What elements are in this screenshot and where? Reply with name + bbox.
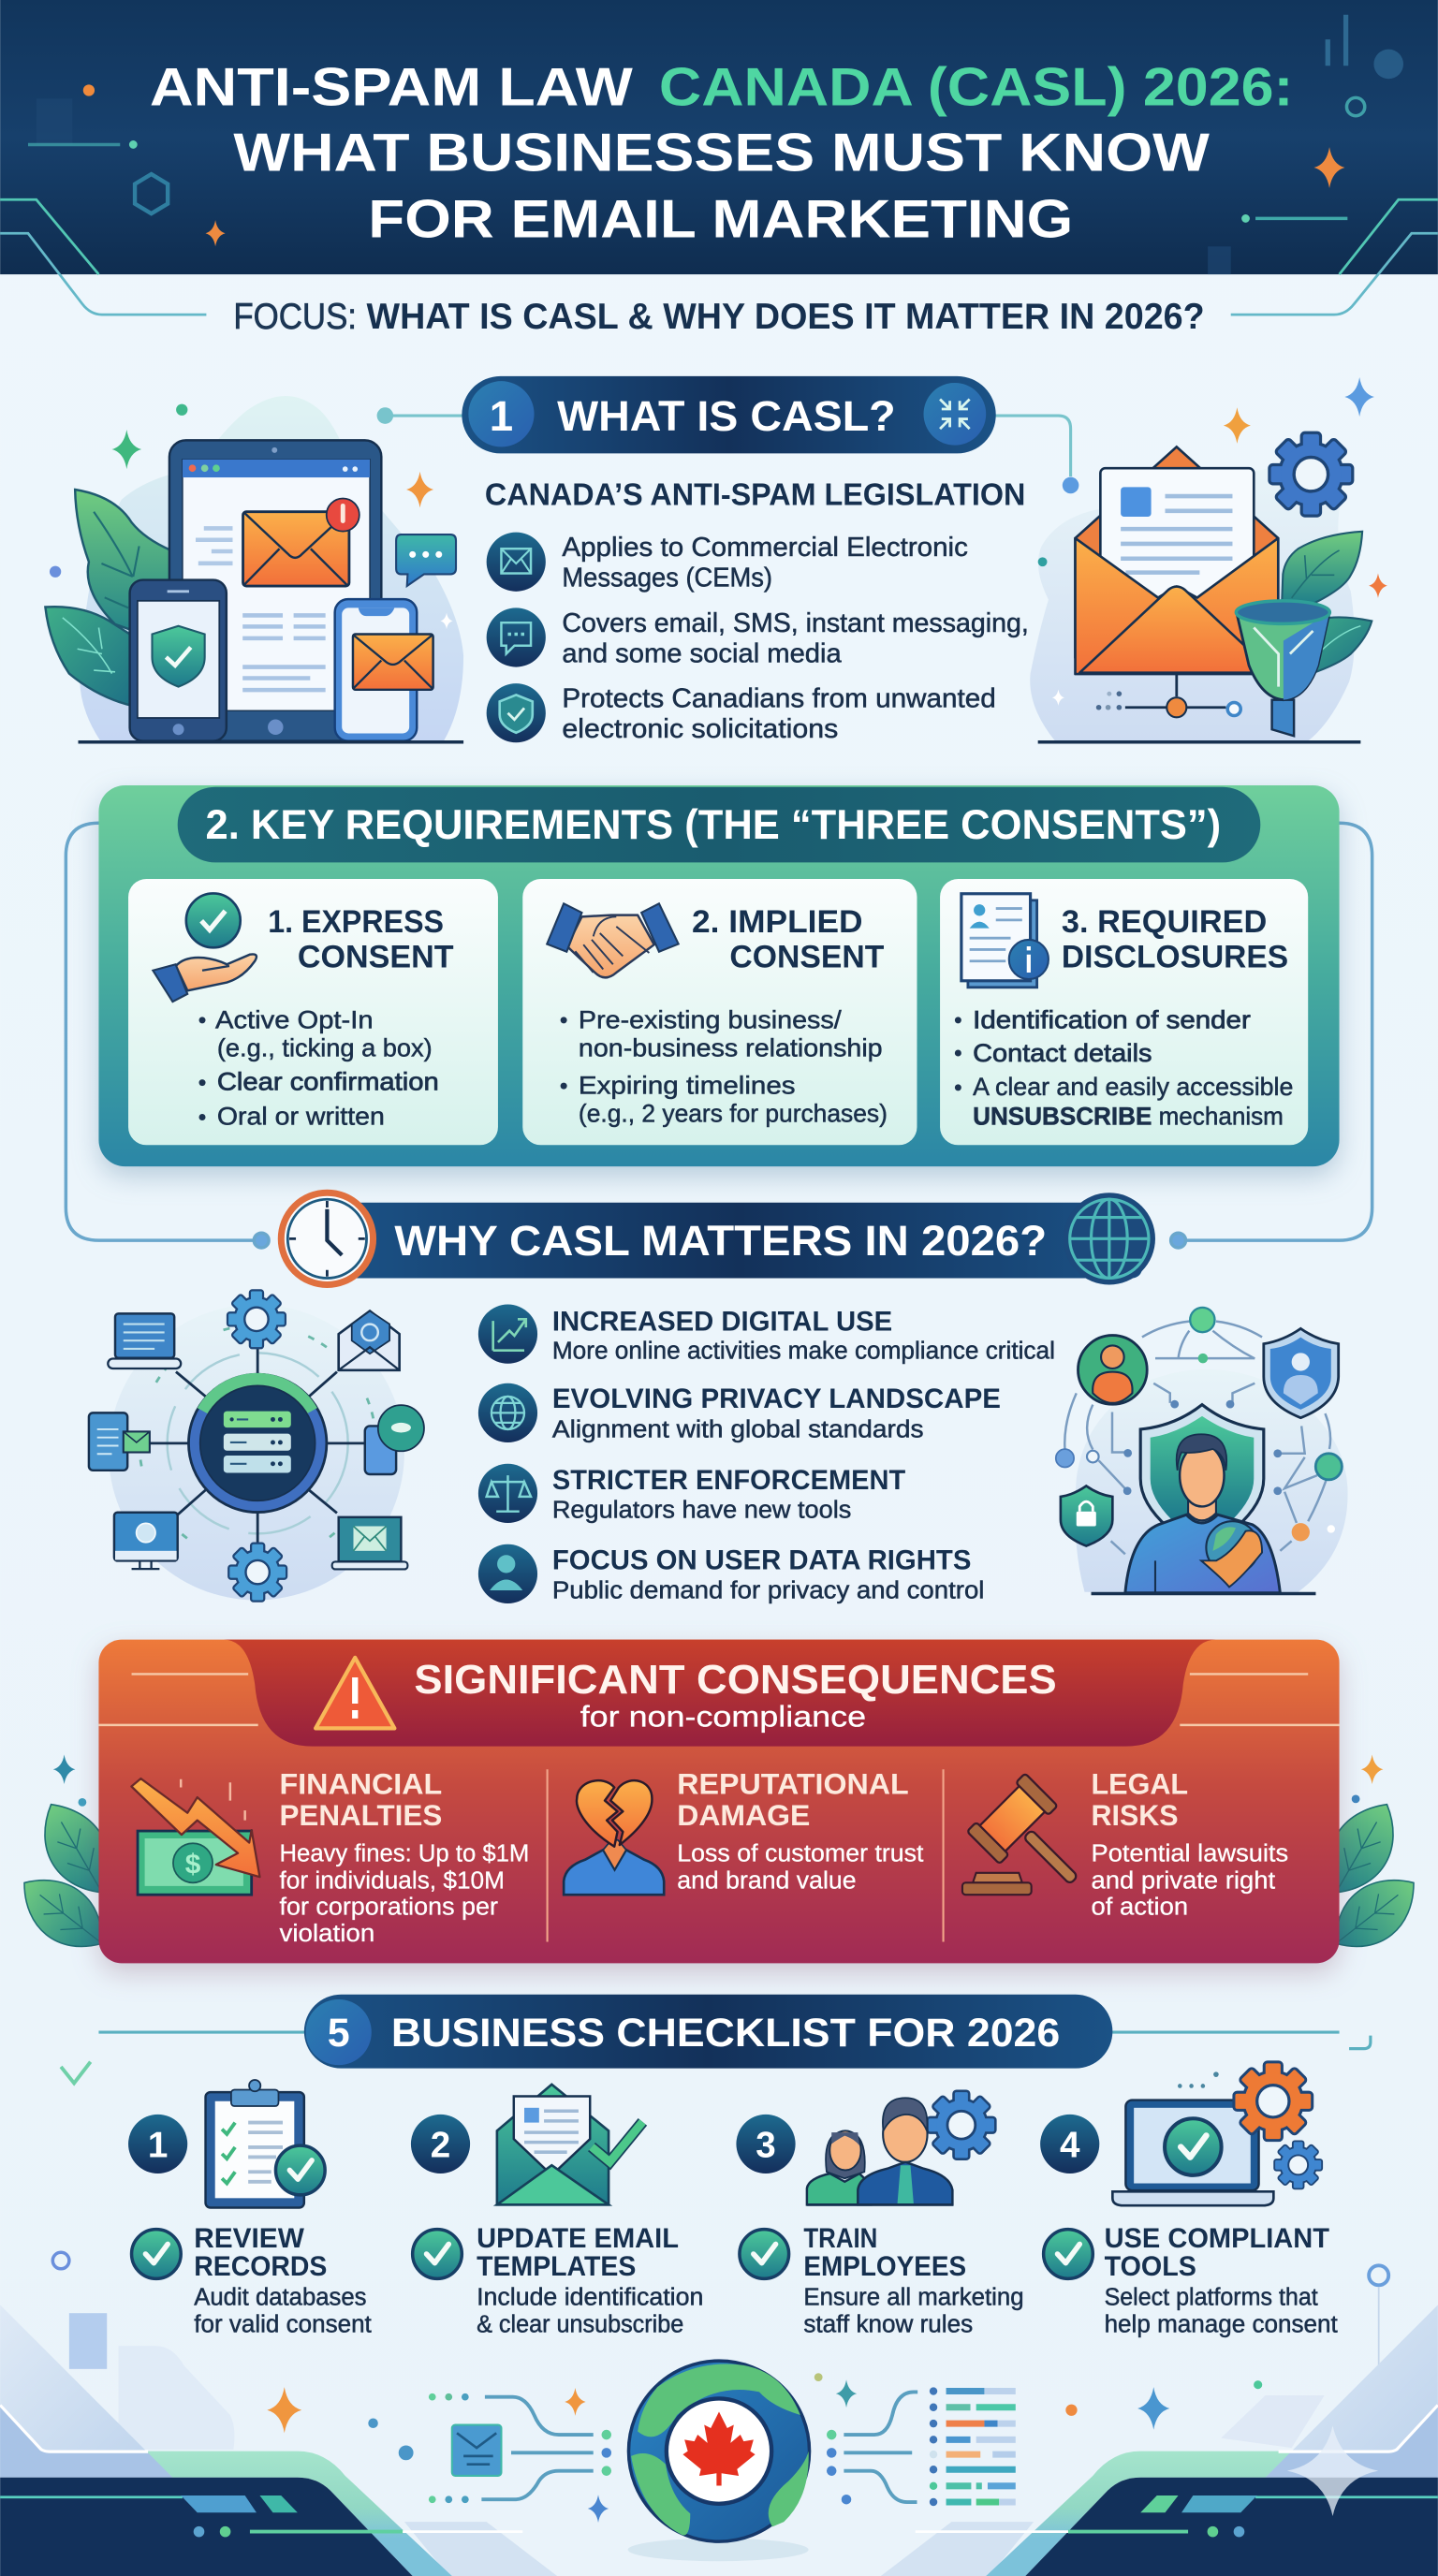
icon: team and gear <box>807 2092 994 2204</box>
column: financial penalties <box>131 1767 529 1947</box>
card: implied consent: Pre-existing business/ <box>579 1004 842 1033</box>
list item: evolving privacy landscape: Alignment with global standards <box>552 1415 924 1443</box>
card: required disclosures: A clear and easily accessible <box>973 1072 1293 1101</box>
checklist step 3: train employees: 3 <box>756 2125 776 2165</box>
bullet: applies to CEMs <box>487 533 968 593</box>
checklist step 4: use compliant tools: USE COMPLIANT <box>1105 2223 1329 2254</box>
icon: falling money <box>131 1778 259 1895</box>
checklist step 3: train employees: TRAIN <box>803 2223 877 2254</box>
column: financial penalties: for individuals, $10M <box>280 1866 505 1894</box>
bullet: protects Canadians: Protects Canadians from unwanted <box>562 684 996 714</box>
list item: focus on user data rights <box>478 1544 984 1604</box>
checklist step 2: update email templates: 2 <box>431 2125 450 2165</box>
checklist step 1: review records: for valid consent <box>194 2309 372 2337</box>
icon: green envelope <box>497 2085 642 2204</box>
circuit lines left <box>429 2388 611 2523</box>
checklist step 3: train employees: EMPLOYEES <box>803 2251 966 2282</box>
section 1 connectors <box>377 407 1078 493</box>
leaf lower <box>45 607 135 707</box>
list item: increased digital use <box>478 1305 1055 1364</box>
checklist step 4: use compliant tools: Select platforms that <box>1105 2282 1318 2310</box>
checklist step 3: train employees: Ensure all marketing <box>803 2282 1024 2310</box>
card: implied consent: Expiring timelines <box>579 1071 796 1100</box>
leaf lower right <box>1299 617 1372 674</box>
list item: stricter enforcement: Regulators have new tools <box>552 1496 851 1524</box>
icon: broken heart and person <box>564 1780 664 1895</box>
card: required disclosures: DISCLOSURES <box>1062 940 1288 975</box>
card: express consent <box>128 879 498 1145</box>
card: express consent: CONSENT <box>298 940 454 975</box>
checklist step 4: use compliant tools: 4 <box>1060 2125 1080 2165</box>
icon: document with info <box>961 894 1049 988</box>
card: express consent: 1. EXPRESS <box>268 904 444 940</box>
column: legal risks: of action <box>1092 1893 1188 1921</box>
subheading: Canada's anti-spam legislation: CANADA’S ANTI-SPAM LEGISLATION <box>485 478 1025 513</box>
icon: globe <box>1064 1193 1155 1284</box>
panel: significant consequences: for non-compliance <box>580 1700 866 1734</box>
checklist step 3: train employees: staff know rules <box>803 2309 973 2337</box>
laptop bottom right <box>332 1517 407 1569</box>
column: financial penalties: Heavy fines: Up to $1M <box>280 1839 529 1867</box>
card: required disclosures: 3. REQUIRED <box>1062 904 1267 940</box>
card: implied consent <box>522 879 917 1145</box>
icon: laptop with gears <box>1112 2063 1321 2205</box>
bullet: covers email and SMS: and some social media <box>562 638 843 668</box>
leaf upper right <box>1282 532 1362 605</box>
icon: gavel base <box>962 1873 1032 1895</box>
title: WHAT BUSINESSES MUST KNOW <box>233 124 1210 183</box>
panel: significant consequences: SIGNIFICANT CONSEQUENCES <box>414 1657 1057 1703</box>
list item: focus on user data rights: Public demand for privacy and control <box>552 1576 984 1604</box>
section 5 heading pill: 5 <box>328 2011 350 2056</box>
list item: increased digital use: More online activities make compliance critical <box>552 1336 1055 1364</box>
title <box>150 57 1293 250</box>
section 5 heading pill <box>304 1995 1112 2069</box>
section 1 heading pill: 1 <box>490 392 513 440</box>
icon: clock <box>281 1193 374 1284</box>
illustration: network hub <box>89 1292 424 1600</box>
card: express consent: (e.g., ticking a box) <box>217 1033 433 1062</box>
checklist step 2: update email templates: UPDATE EMAIL <box>477 2223 679 2254</box>
checklist step 4: use compliant tools: help manage consent <box>1105 2309 1338 2337</box>
column: legal risks: and private right <box>1092 1866 1276 1894</box>
circuit lines and data bars right <box>814 2373 1016 2506</box>
card: required disclosures <box>940 879 1308 1145</box>
section 1 heading pill: WHAT IS CASL? <box>557 392 896 440</box>
laptop top left <box>108 1313 181 1368</box>
bullet: protects Canadians: electronic solicitations <box>562 714 838 744</box>
list item: increased digital use: INCREASED DIGITAL USE <box>552 1307 892 1338</box>
column: financial penalties: for corporations per <box>280 1893 498 1921</box>
phone with chat bubble <box>365 1405 424 1474</box>
section 2 side connectors <box>66 823 1372 1248</box>
globe with Canadian maple leaf <box>628 2361 810 2561</box>
side connector lines of focus strip <box>0 233 1438 315</box>
central shield <box>1140 1405 1264 1528</box>
leaf upper <box>75 490 171 644</box>
card: implied consent: 2. IMPLIED <box>692 904 863 940</box>
focus line: WHAT IS CASL & WHY DOES IT MATTER IN 2026? <box>367 297 1205 337</box>
title: CANADA (CASL) 2026: <box>659 57 1293 117</box>
envelope top right <box>339 1311 400 1370</box>
column: reputational damage: Loss of customer trust <box>677 1839 924 1867</box>
column: legal risks: LEGAL <box>1092 1767 1188 1801</box>
checklist step 2: update email templates: TEMPLATES <box>477 2251 636 2282</box>
section 2 heading pill <box>178 787 1260 862</box>
card: implied consent: (e.g., 2 years for purchases) <box>579 1099 888 1128</box>
bullet: applies to CEMs: Applies to Commercial Electronic <box>562 533 968 563</box>
blue shield <box>1264 1328 1339 1418</box>
section 1 heading pill <box>462 376 996 453</box>
bullet: protects Canadians <box>487 683 996 744</box>
card: implied consent: CONSENT <box>729 940 884 975</box>
checklist step 4: use compliant tools <box>1040 2063 1338 2337</box>
checklist step 3: train employees <box>736 2092 1024 2337</box>
card: required disclosures: Identification of sender <box>973 1004 1251 1033</box>
illustration: devices with email <box>45 396 463 742</box>
column: financial penalties: violation <box>280 1919 374 1947</box>
icon: gavel <box>967 1773 1103 1910</box>
column: reputational damage: REPUTATIONAL <box>677 1767 909 1801</box>
bullet: applies to CEMs: Messages (CEMs) <box>562 564 772 593</box>
section 5 side lines <box>98 2032 1371 2049</box>
card: express consent: Clear confirmation <box>217 1067 439 1096</box>
title: FOR EMAIL MARKETING <box>368 190 1073 250</box>
section 3 heading pill: WHY CASL MATTERS IN 2026? <box>394 1217 1047 1265</box>
checklist step 2: update email templates: Include identification <box>477 2282 703 2310</box>
icon: clipboard <box>206 2080 325 2208</box>
focus line: FOCUS: <box>233 297 357 337</box>
checklist step 1: review records <box>128 2080 372 2337</box>
card: required disclosures: Contact details <box>973 1038 1152 1067</box>
column: financial penalties: PENALTIES <box>280 1798 442 1832</box>
section 2 heading pill: 2. KEY REQUIREMENTS (THE “THREE CONSENTS”) <box>206 801 1221 848</box>
column: reputational damage <box>564 1767 924 1895</box>
monitor bottom left <box>114 1513 178 1569</box>
illustration: open envelope with funnel <box>1030 377 1387 742</box>
checklist step 2: update email templates: & clear unsubscribe <box>477 2309 683 2337</box>
panel: significant consequences <box>98 1640 1340 1963</box>
column: legal risks <box>962 1767 1288 1921</box>
list item: stricter enforcement: STRICTER ENFORCEMENT <box>552 1465 905 1496</box>
column: reputational damage: and brand value <box>677 1866 857 1894</box>
section 5 heading pill: BUSINESS CHECKLIST FOR 2026 <box>391 2011 1060 2056</box>
title: ANTI-SPAM LAW <box>150 57 633 117</box>
icon: funnel <box>1236 601 1329 736</box>
small green tick <box>61 2062 91 2083</box>
card: express consent: Active Opt-In <box>215 1004 374 1033</box>
list item: evolving privacy landscape: EVOLVING PRIVACY LANDSCAPE <box>552 1383 1001 1414</box>
illustration: protected person <box>1056 1308 1348 1593</box>
checklist step 2: update email templates <box>411 2085 703 2337</box>
icon: check in hand <box>153 893 257 1002</box>
checklist step 1: review records: RECORDS <box>194 2251 327 2282</box>
list item: stricter enforcement <box>478 1464 905 1524</box>
card: express consent: Oral or written <box>217 1102 385 1131</box>
checklist step 4: use compliant tools: TOOLS <box>1105 2251 1196 2282</box>
column: financial penalties: FINANCIAL <box>280 1767 442 1801</box>
tablet left <box>89 1412 150 1471</box>
checklist step 1: review records: 1 <box>148 2125 168 2165</box>
checklist step 1: review records: REVIEW <box>194 2223 305 2254</box>
card: implied consent: non-business relationship <box>579 1033 883 1062</box>
column: legal risks: Potential lawsuits <box>1092 1839 1288 1867</box>
card: required disclosures: UNSUBSCRIBE mechanism <box>973 1102 1284 1131</box>
icon: warning triangle <box>315 1658 394 1728</box>
bullet: covers email and SMS <box>487 607 1029 668</box>
footer background shapes <box>0 2252 1438 2576</box>
icon: handshake <box>547 903 679 977</box>
panel: key requirements <box>98 785 1340 1166</box>
icon: falling money: $ <box>185 1850 201 1881</box>
column: legal risks: RISKS <box>1092 1798 1179 1832</box>
decorative leaves beside consequences <box>7 1754 1431 1965</box>
list item: evolving privacy landscape <box>478 1383 1001 1443</box>
bullet: covers email and SMS: Covers email, SMS, instant messaging, <box>562 608 1029 638</box>
column: reputational damage: DAMAGE <box>677 1798 810 1832</box>
list item: focus on user data rights: FOCUS ON USER DATA RIGHTS <box>552 1545 971 1576</box>
lock shield <box>1061 1486 1112 1546</box>
checklist step 1: review records: Audit databases <box>194 2282 367 2310</box>
header band <box>0 0 1438 274</box>
section 3 heading pill <box>281 1193 1155 1284</box>
